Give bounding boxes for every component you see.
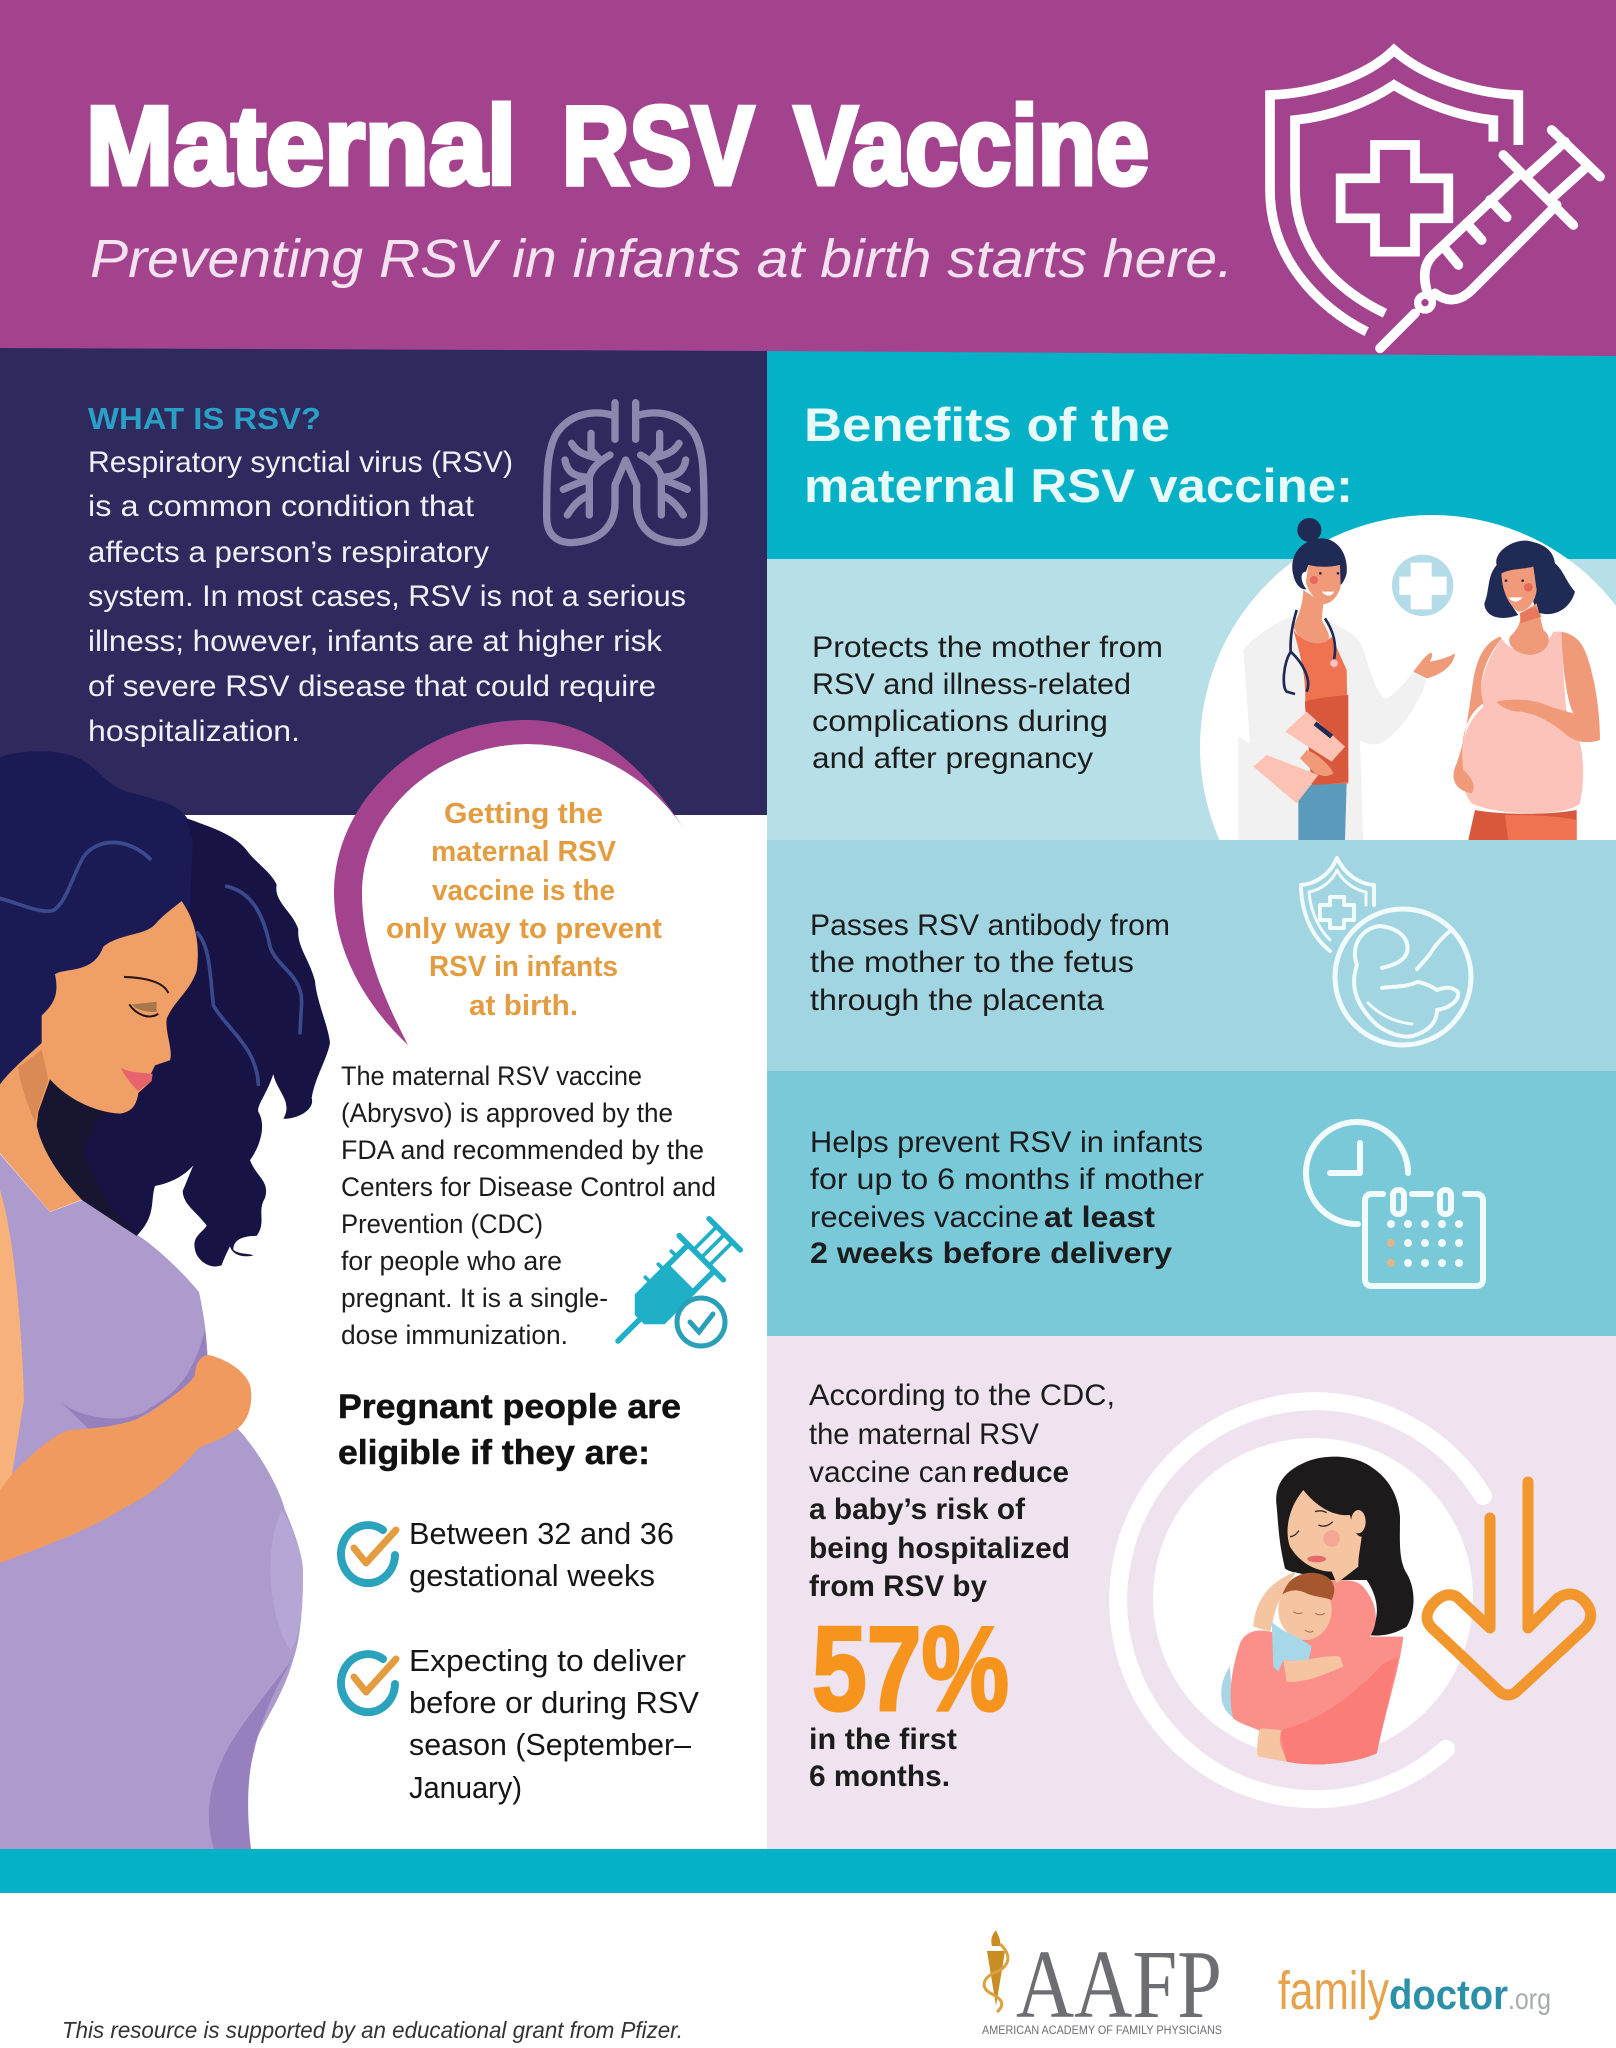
dress shadow under arm	[60, 1330, 207, 1440]
logo: AAFP: AMERICAN ACADEMY OF FAMILY PHYSICIANS	[982, 2025, 1222, 2037]
eyebrow	[124, 977, 168, 993]
footer teal band	[0, 1849, 1616, 1893]
text block: RSV description: Respiratory synctial virus (RSV)	[88, 446, 513, 479]
text: benefit 1: and after pregnancy	[812, 742, 1093, 775]
text block: vaccine description: for people who are	[341, 1246, 562, 1276]
sweater	[1231, 1580, 1403, 1764]
heading: eligibility: eligible if they are:	[338, 1434, 650, 1472]
heading: eligibility	[338, 1388, 681, 1472]
logo: familydoctor.org: doctor	[1389, 1971, 1508, 2018]
arm and hand	[0, 1190, 251, 1563]
text: eligibility item 1	[409, 1516, 674, 1593]
panel: benefit row 3 background	[767, 1071, 1616, 1336]
text: benefit 4 statistic	[809, 1379, 1115, 1793]
neck shadow	[36, 1079, 137, 1236]
baby onesie	[1272, 1622, 1312, 1672]
closed eye	[132, 1002, 157, 1012]
text: benefit 3: Helps prevent RSV in infants	[810, 1126, 1203, 1159]
title	[86, 84, 1149, 208]
callout: crescent and message	[334, 720, 687, 1045]
text block: vaccine description: Centers for Disease Control and	[341, 1172, 716, 1202]
text: benefit 3: for up to 6 months if mother	[810, 1163, 1204, 1196]
back hair	[37, 816, 330, 1267]
doctor coat	[1238, 617, 1427, 840]
logo: familydoctor.org	[1278, 1961, 1551, 2021]
title: Maternal	[86, 84, 516, 208]
doctor shirt	[1293, 630, 1348, 787]
doctor head	[1297, 518, 1321, 542]
doctor neck	[1293, 590, 1329, 643]
logo: familydoctor.org: family	[1278, 1961, 1389, 2021]
text: benefit 4 statistic: a baby’s risk of	[809, 1493, 1026, 1526]
text: benefit 2	[810, 909, 1170, 1017]
text: benefit 1: Protects the mother from	[812, 631, 1163, 664]
text: benefit 4 statistic: in the first	[809, 1723, 957, 1756]
statistic: 57%: 57%	[812, 1602, 1009, 1736]
patient top	[1460, 632, 1583, 813]
icon: down arrow	[1427, 1482, 1591, 1695]
text: benefit 3	[810, 1126, 1204, 1270]
text: benefit 1: complications during	[812, 705, 1108, 738]
title: RSV	[562, 84, 754, 208]
patient arms	[1453, 637, 1502, 793]
white circle	[1200, 515, 1616, 840]
front hair	[0, 751, 193, 1088]
text block: RSV description: illness; however, infants are at higher risk	[88, 625, 663, 658]
text: eligibility item 2: before or during RSV	[409, 1685, 699, 1720]
text: benefit 4 statistic: from RSV by	[809, 1570, 987, 1603]
ring	[1118, 1401, 1483, 1799]
callout text: maternal RSV	[431, 836, 617, 868]
text: benefit 4 statistic: being hospitalized	[809, 1532, 1070, 1565]
logo: AAFP: AAFP	[1016, 1931, 1222, 2038]
panel: benefit row 1 background	[767, 559, 1616, 840]
callout text	[386, 798, 662, 1022]
panel: benefits header	[767, 351, 1616, 559]
dress	[0, 1154, 303, 1849]
illustration: pregnant woman	[0, 751, 330, 1849]
text: benefit 1: RSV and illness-related	[812, 668, 1131, 701]
icon: check 2	[341, 1654, 396, 1712]
patient hair	[1484, 541, 1575, 618]
text: benefit 1	[812, 631, 1163, 775]
text: benefit 4 statistic: According to the CDC,	[809, 1379, 1115, 1412]
icon: shield and syringe	[1270, 50, 1600, 348]
text block: RSV description: affects a person’s respiratory	[88, 536, 489, 569]
illustration: mother and baby with ring	[1118, 1401, 1591, 1799]
callout text: RSV in infants	[429, 951, 618, 983]
baby arm	[1283, 1656, 1343, 1682]
text block: vaccine description: pregnant. It is a single-	[341, 1283, 608, 1313]
baby head	[1278, 1580, 1332, 1640]
heading: eligibility: Pregnant people are	[338, 1388, 681, 1426]
lower arm	[1257, 1728, 1287, 1762]
caduceus	[984, 1930, 1008, 2012]
panel: benefit row 4 background	[767, 1336, 1616, 1849]
text block: RSV description: of severe RSV disease that could require	[88, 670, 656, 703]
stethoscope	[1284, 610, 1335, 694]
lips	[121, 1068, 153, 1091]
icon: syringe with check	[596, 1212, 747, 1363]
head group	[0, 751, 330, 1267]
subtitle: Preventing RSV in infants at birth starts here.	[90, 229, 1233, 289]
text: benefit 3: receives vaccine	[810, 1201, 1039, 1234]
text: eligibility item 2: Expecting to deliver	[409, 1643, 686, 1678]
text: benefit 4 statistic: 6 months.	[809, 1760, 950, 1793]
doctor open hand	[1413, 653, 1455, 678]
text: benefit 3: at least	[1044, 1201, 1155, 1234]
text: benefit 3: 2 weeks before delivery	[810, 1237, 1172, 1270]
dress shading	[209, 1657, 294, 1849]
text block: RSV description: hospitalization.	[88, 715, 300, 748]
panel: header banner	[0, 0, 1616, 356]
callout text: vaccine is the	[432, 875, 615, 907]
text block: vaccine description	[341, 1061, 716, 1350]
heading: benefits: maternal RSV vaccine:	[804, 459, 1353, 512]
footer note: This resource is supported by an educational grant from Pfizer.	[62, 2017, 683, 2043]
callout text: Getting the	[444, 798, 603, 830]
illustration: doctor and pregnant patient	[1200, 515, 1616, 840]
text: benefit 4 statistic: reduce	[972, 1456, 1069, 1489]
icon: clock and calendar	[1306, 1122, 1483, 1286]
paper and clipboard	[1253, 755, 1318, 803]
text block: vaccine description: The maternal RSV vaccine	[341, 1061, 642, 1091]
text: benefit 2: Passes RSV antibody from	[810, 909, 1170, 942]
text: eligibility item 2	[409, 1643, 699, 1805]
text: eligibility item 1: gestational weeks	[409, 1558, 655, 1593]
text: benefit 4 statistic: the maternal RSV	[809, 1418, 1039, 1451]
callout text: only way to prevent	[386, 913, 662, 945]
heading: benefits	[804, 398, 1353, 512]
text: eligibility item 1: Between 32 and 36	[409, 1516, 674, 1551]
blanket	[1221, 1667, 1233, 1718]
face and neck	[0, 901, 198, 1212]
title: Vaccine	[794, 84, 1149, 208]
text block: RSV description: is a common condition that	[88, 490, 475, 523]
patient neck	[1509, 603, 1549, 655]
callout text: at birth.	[469, 990, 578, 1022]
text: eligibility item 2: season (September–	[409, 1727, 692, 1762]
text: benefit 4 statistic: vaccine can	[809, 1456, 967, 1489]
text block: RSV description: system. In most cases, RSV is not a serious	[88, 580, 686, 613]
crescent	[334, 720, 686, 1045]
text block: RSV description	[88, 446, 686, 748]
text block: vaccine description: dose immunization.	[341, 1320, 568, 1350]
text: benefit 2: through the placenta	[810, 984, 1104, 1017]
dress highlight	[270, 1510, 303, 1650]
text block: vaccine description: Prevention (CDC)	[341, 1209, 543, 1239]
mother hand	[1253, 1572, 1297, 1632]
text: eligibility item 2: January)	[409, 1770, 522, 1805]
panel: benefit row 2 background	[767, 840, 1616, 1071]
logo: familydoctor.org: .org	[1508, 1983, 1551, 2016]
text block: vaccine description: FDA and recommended by the	[341, 1135, 704, 1165]
heading: what is RSV: WHAT IS RSV?	[88, 401, 321, 436]
icon: shield and fetus	[1301, 858, 1471, 1045]
text: benefit 2: the mother to the fetus	[810, 946, 1134, 979]
text block: vaccine description: (Abrysvo) is approved by the	[341, 1098, 673, 1128]
icon: lungs	[547, 403, 704, 543]
plus badge	[1392, 555, 1453, 616]
icon: check 1	[341, 1525, 396, 1583]
hair	[1276, 1457, 1414, 1636]
heading: benefits: Benefits of the	[804, 398, 1170, 451]
face	[1288, 1490, 1362, 1583]
patient pants	[1468, 810, 1577, 840]
panel: what is RSV background	[0, 348, 767, 815]
doctor pants	[1298, 783, 1347, 840]
patient face	[1502, 567, 1537, 612]
hair highlights	[0, 842, 302, 1084]
